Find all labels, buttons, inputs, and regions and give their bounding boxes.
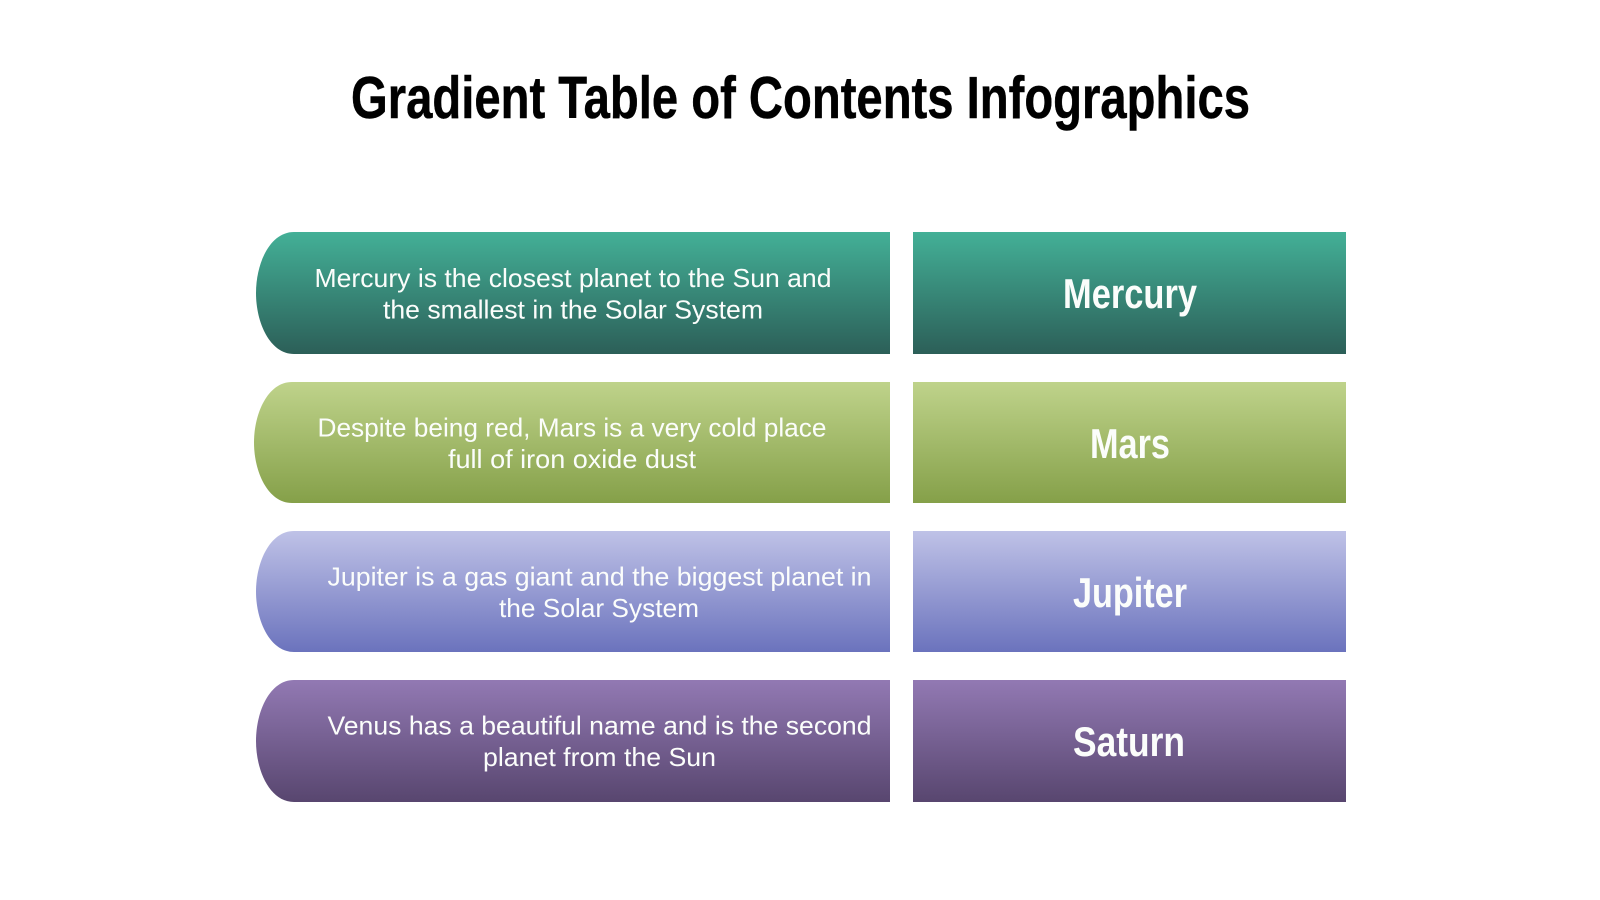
panel: Mars name: Mars [1090, 420, 1170, 467]
panel: Mars description: Despite being red, Mars is a very cold place [318, 412, 826, 442]
panel: Mercury description: the smallest in the Solar System [383, 294, 763, 324]
panel: Jupiter description: the Solar System [499, 593, 699, 623]
panel: Saturn description: Venus has a beautiful name and is the second [328, 710, 872, 740]
panel: Mars description [254, 382, 890, 503]
row: Saturn [256, 680, 1346, 802]
panel: Jupiter name: Jupiter [1073, 569, 1187, 616]
panel: Jupiter description: Jupiter is a gas giant and the biggest planet in [328, 562, 872, 592]
panel: Jupiter description [256, 531, 890, 652]
panel: Saturn name: Saturn [1073, 718, 1185, 765]
panel: Mercury description: Mercury is the closest planet to the Sun and [314, 263, 832, 293]
panel: Mercury name: Mercury [1063, 270, 1198, 317]
panel: Jupiter name [913, 531, 1346, 652]
panel: Mars name [913, 382, 1346, 503]
panel: Saturn description: planet from the Sun [483, 742, 716, 772]
panel: Mercury description [256, 232, 890, 354]
panel: Mars description: full of iron oxide dust [448, 444, 697, 474]
panel: Saturn description [256, 680, 890, 802]
panel: Saturn name [913, 680, 1346, 802]
title: Gradient Table of Contents Infographics [351, 65, 1250, 131]
panel: Mercury name [913, 232, 1346, 354]
row: Jupiter [256, 531, 1346, 652]
row: Mars [254, 382, 1346, 503]
row: Mercury [256, 232, 1346, 354]
